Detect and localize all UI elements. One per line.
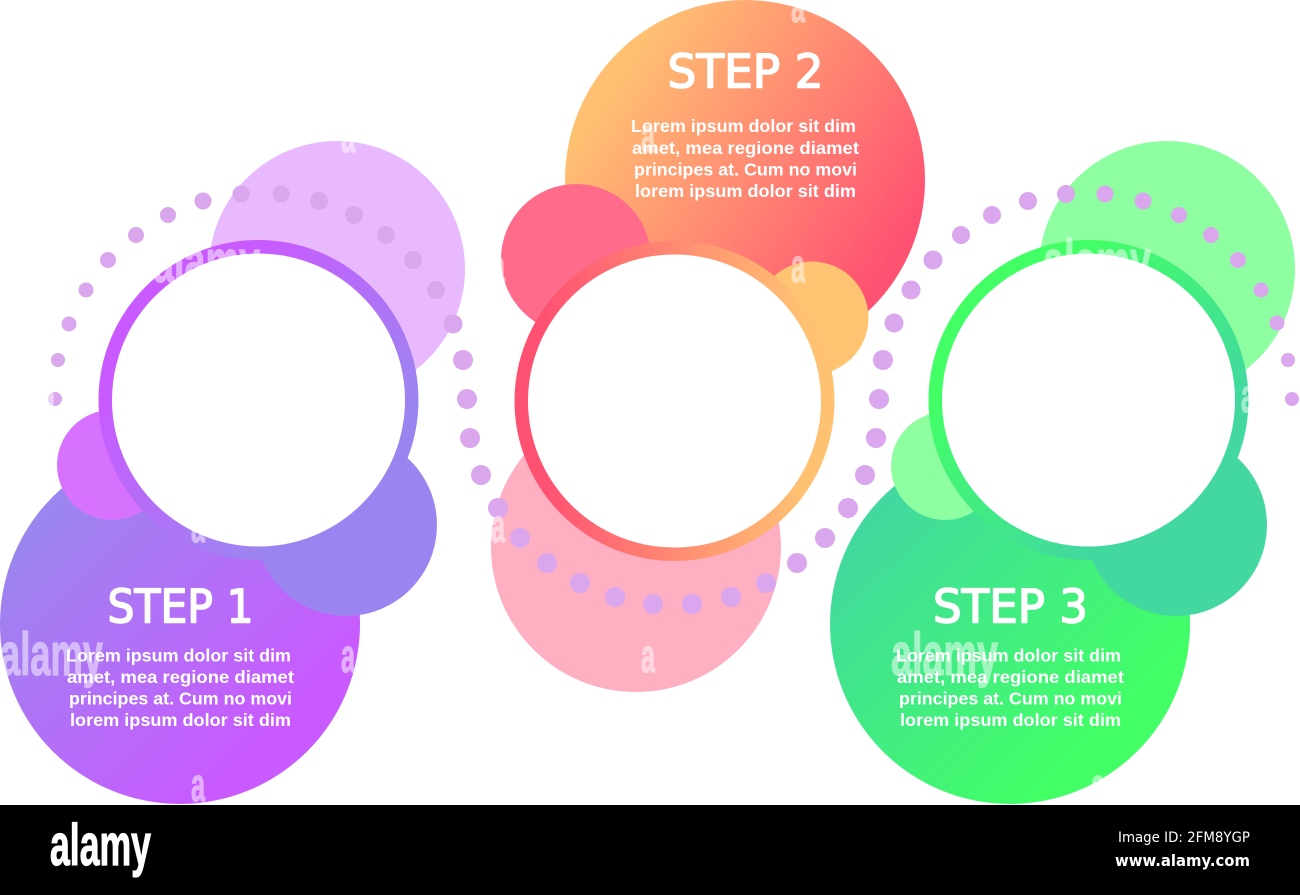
body text step 1: amet, mea regione diamet [67,667,294,687]
watermarks: alamy [1043,228,1151,295]
orange circle [756,262,868,374]
body text step 2: amet, mea regione diamet [632,138,859,158]
body text step 2: principes at. Cum no movi [634,160,857,180]
footer bar [0,805,1300,895]
watermarks: a [641,629,655,682]
light purple back circle [209,141,465,397]
website: www.alamy.com [1115,851,1250,870]
heading step 2: STEP 2 [668,44,824,98]
heading step 1: STEP 1 [108,580,254,634]
body text step 3: amet, mea regione diamet [897,667,1124,687]
watermarks: a [641,109,655,162]
panel: step 2 [491,0,925,692]
body text step 3: Lorem ipsum dolor sit dim [896,646,1121,666]
body text step 1: Lorem ipsum dolor sit dim [66,646,291,666]
teal circle [1085,434,1267,616]
ring step 2 [521,248,828,554]
body text step 3: principes at. Cum no movi [899,688,1122,708]
small purple circle [57,410,167,520]
body text step 2: Lorem ipsum dolor sit dim [631,116,856,136]
panel: step 1 [0,141,465,804]
body text step 1: principes at. Cum no movi [69,688,292,708]
dotted path [48,185,1299,614]
watermarks: a [191,499,205,552]
pink circle [501,184,651,334]
watermarks: a [491,499,505,552]
ring step 1 [105,247,412,553]
watermarks: alamy [0,621,103,688]
watermarks: a [341,109,355,162]
watermarks: a [791,239,805,292]
watermarks: a [1241,369,1255,422]
watermarks: a [41,369,55,422]
watermarks: a [1091,758,1105,811]
large gradient circle step 3 [830,444,1190,804]
ring step 3 [935,247,1242,553]
body text step 1: lorem ipsum dolor sit dim [70,710,291,730]
watermarks: alamy [153,228,260,295]
panel: step 3 [830,141,1295,804]
watermarks: a [341,629,355,682]
watermarks: a [491,239,505,292]
large gradient circle step 2 [565,0,925,360]
light green back circle [1039,141,1295,397]
body text step 3: lorem ipsum dolor sit dim [900,710,1121,730]
image id: Image ID: 2FM8YGP [1118,830,1250,846]
alamy logo: alamy [50,813,151,878]
heading step 3: STEP 3 [933,580,1088,634]
periwinkle circle [255,434,437,616]
watermarks: a [191,758,205,811]
small light green circle [891,412,999,520]
watermarks: alamy [891,621,998,688]
pale pink circle [491,402,781,692]
large gradient circle step 1 [0,444,360,804]
body text step 2: lorem ipsum dolor sit dim [635,181,856,201]
